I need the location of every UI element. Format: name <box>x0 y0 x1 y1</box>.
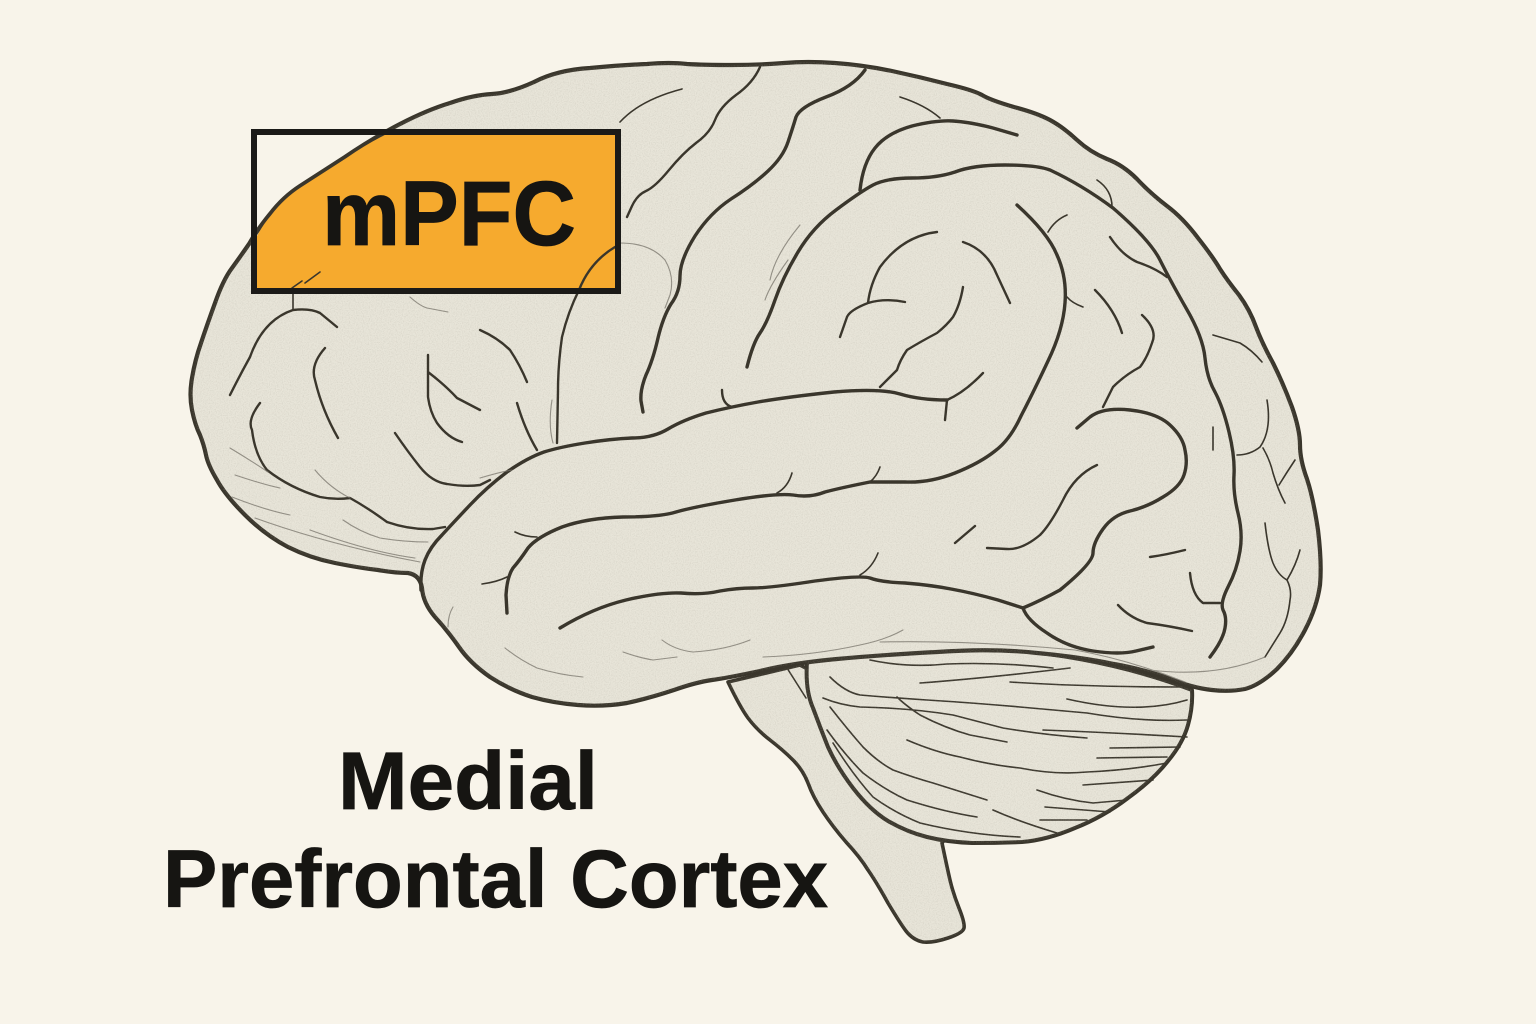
occipital folds <box>955 237 1220 631</box>
frontal lobe faint lines <box>230 225 800 562</box>
lateral fissure upper edge <box>421 390 947 590</box>
superior branches <box>482 89 1112 584</box>
mPFC box frame <box>254 132 618 291</box>
central sulcus <box>641 70 865 412</box>
frontal lobe folds <box>230 309 537 529</box>
upper parietal arc <box>860 121 1017 190</box>
outer occipital folds <box>1213 335 1300 657</box>
caption: Medial Prefrontal Cortex <box>163 736 828 925</box>
brain stem <box>728 665 1000 942</box>
inner parietal folds <box>722 232 1010 420</box>
temporal lobe faint lines <box>448 607 1265 682</box>
outlines over highlight <box>257 133 615 443</box>
cerebellum <box>807 648 1192 843</box>
temporal band upper sulcus <box>506 205 1065 613</box>
caption: Medial Prefrontal Cortex: Medial <box>338 736 598 827</box>
brain illustration <box>190 62 1321 942</box>
precentral sulcus <box>627 67 760 217</box>
stem divider <box>787 668 806 698</box>
temporal band lower sulcus <box>560 409 1186 628</box>
temporal lower hook <box>1023 608 1153 653</box>
cerebrum outline <box>190 62 1321 706</box>
caption: Medial Prefrontal Cortex: Prefrontal Cortex <box>163 834 828 925</box>
paper grain texture <box>190 62 1320 942</box>
cortical sulci <box>230 67 1300 682</box>
large parietal arch <box>747 165 1241 657</box>
highlighted mPFC region <box>257 133 615 288</box>
region label mPFC: mPFC <box>322 163 576 265</box>
